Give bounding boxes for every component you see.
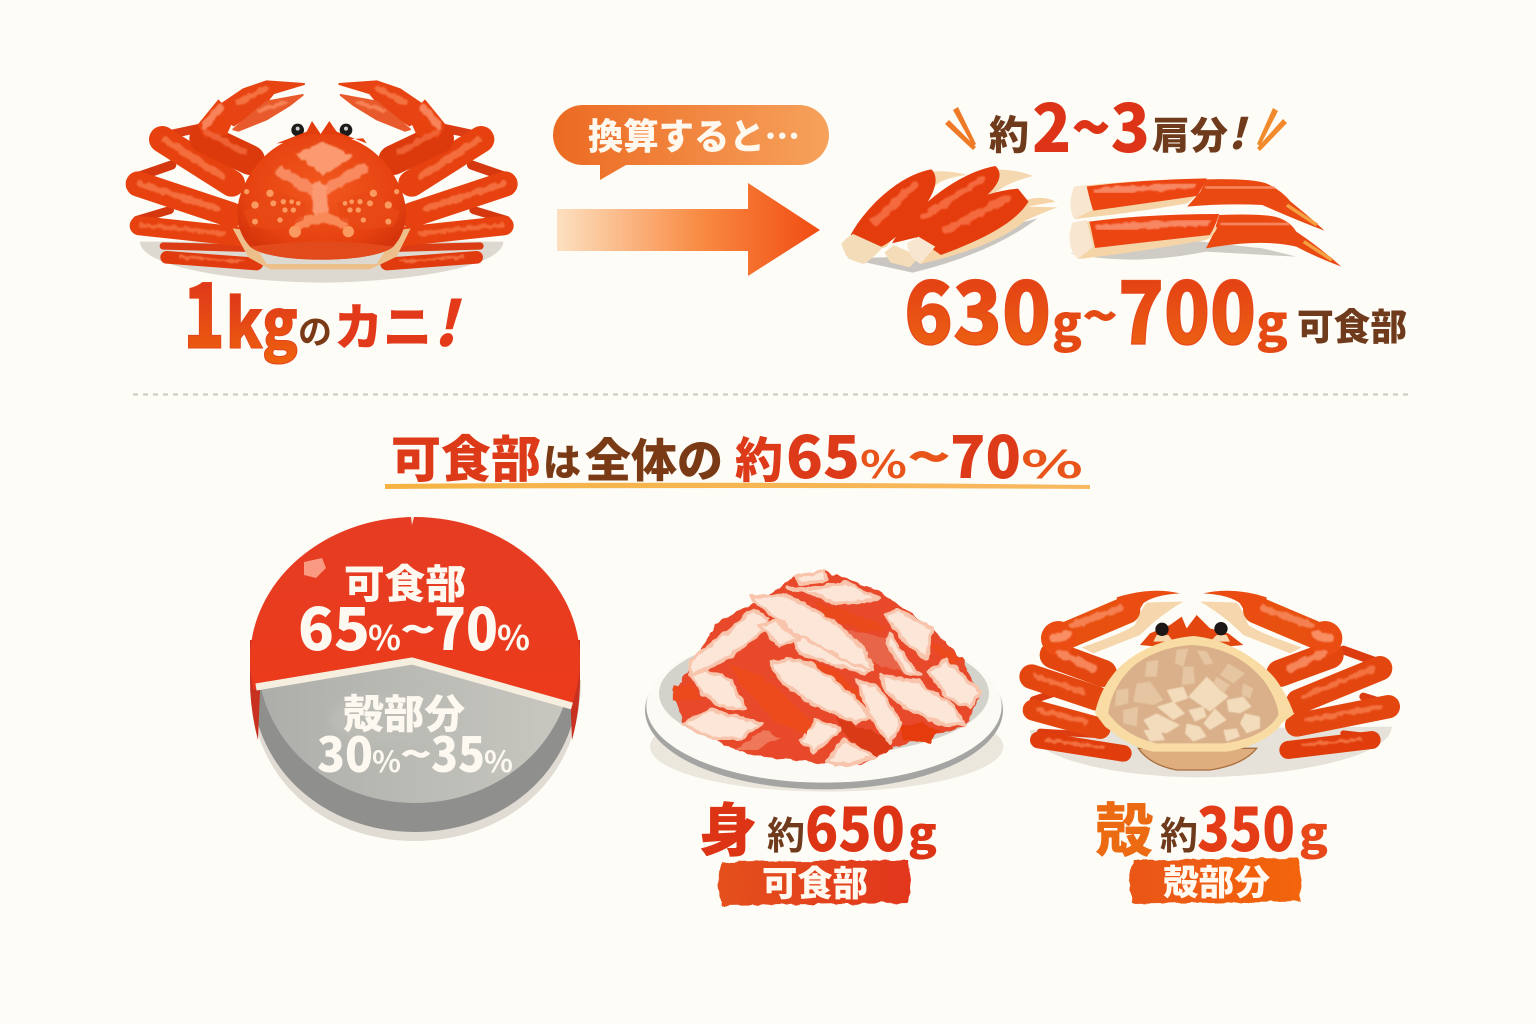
left legs and claw (133, 81, 304, 264)
heading: 可食部は全体の 約65%~70%: ~ (907, 416, 951, 491)
label: 殻 約350g (1095, 782, 1328, 869)
heading: 約2~3肩分!: 肩分 (1152, 105, 1228, 160)
label: 1kgのカニ!: 1 (183, 247, 225, 374)
weight: 630g~700g 可食部: ~ (1082, 275, 1118, 350)
shell crab legs (1032, 650, 1390, 753)
speech bubble: 換算すると… (553, 105, 829, 180)
edible text: 70 (434, 583, 498, 667)
weight: 630g~700g 可食部: 700 (1118, 246, 1256, 369)
right legs and claw (339, 81, 510, 264)
label: 1kgのカニ! (183, 247, 462, 374)
shell text: % (484, 739, 513, 781)
weight: 630g~700g 可食部 (904, 246, 1407, 369)
heading: 約2~3肩分!: 2~3 (1032, 76, 1150, 172)
shell rim (1095, 636, 1294, 752)
shell crab claw, right (1200, 591, 1342, 673)
edible text: 可食部 (344, 552, 466, 610)
shell text: 殻部分 (343, 682, 465, 740)
shell text (317, 682, 513, 786)
white meat flakes (683, 571, 980, 765)
burst marks right (1257, 108, 1287, 151)
tag: 殻部分 (1129, 855, 1302, 906)
heading: 可食部は全体の 約65%~70%: % (860, 434, 907, 489)
shell crab claw, left (1041, 591, 1183, 673)
pair shadow (1071, 240, 1338, 267)
tray under body (233, 228, 411, 269)
heading: 約2~3肩分!: ! (1228, 101, 1249, 162)
red flake on top (730, 602, 888, 735)
weight: 630g~700g 可食部: g (1256, 284, 1288, 356)
plate shadow (650, 702, 1003, 792)
label: 1kgのカニ!: カニ (334, 288, 432, 360)
edible text: ~ (400, 597, 436, 658)
tag: 可食部: 可食部 (762, 856, 868, 907)
shell crab shadow (1030, 727, 1392, 777)
weight: 630g~700g 可食部: 630 (904, 246, 1051, 369)
label: 殻 約350g: 約 (1160, 805, 1198, 860)
heading: 可食部は全体の 約65%~70% (391, 411, 1083, 495)
pie gray face (262, 664, 564, 803)
heading: 可食部は全体の 約65%~70%: は (543, 432, 581, 487)
crab shell illustration (1030, 591, 1392, 777)
crab eyes (291, 124, 352, 136)
label: 身 約650g: g (908, 798, 937, 862)
crab shell body (237, 121, 406, 260)
heading: 可食部は全体の 約65%~70%: 70 (950, 411, 1021, 495)
shell text: ~ (400, 724, 432, 779)
whole crab illustration (133, 81, 510, 283)
dark and orange flakes (673, 630, 963, 757)
heading: 可食部は全体の 約65%~70%: 全体の (585, 425, 723, 491)
burst marks left (945, 107, 976, 150)
label: 身 約650g: 650 (805, 782, 905, 869)
tray (1138, 748, 1257, 770)
speech bubble: 換算すると…: 換算すると… (588, 108, 800, 160)
pie base (250, 680, 581, 841)
heading: 可食部は全体の 約65%~70%: % (1021, 434, 1083, 489)
edible text: % (497, 611, 530, 660)
pie red face (250, 517, 580, 702)
heading: 約2~3肩分! (989, 76, 1249, 172)
meat pile base (673, 570, 980, 763)
label: 身 約650g: 身 (699, 784, 757, 868)
crab leg shells, right pair (1070, 178, 1341, 267)
weight: 630g~700g 可食部: 可食部 (1297, 297, 1407, 351)
crab leg shells, left bundle (841, 166, 1057, 273)
heading underline (385, 483, 1090, 489)
edible text: 65 (298, 583, 370, 667)
crab shadow (140, 242, 503, 283)
pie chart: edible vs shell (250, 517, 581, 841)
label: 1kgのカニ!: ! (433, 274, 462, 364)
heading: 約2~3肩分!: 約 (989, 103, 1029, 161)
pie side (250, 670, 580, 832)
tag: 殻部分: 殻部分 (1163, 855, 1270, 906)
shell text: % (372, 739, 401, 781)
label: 身 約650g: 約 (767, 805, 805, 860)
label: 身 約650g (699, 782, 937, 869)
shell interior (1108, 645, 1278, 743)
label: 1kgのカニ!: kg (226, 269, 298, 368)
shell text: 35 (431, 716, 485, 786)
label: 1kgのカニ!: の (298, 305, 332, 354)
shell text: 30 (317, 716, 373, 786)
edible text: % (368, 611, 401, 660)
shell ridges (280, 145, 363, 223)
heading: 可食部は全体の 約65%~70%: 65 (786, 411, 860, 495)
pie red side (250, 640, 262, 740)
shell meat blocks (1143, 677, 1260, 742)
plate of crab meat (645, 570, 1003, 792)
edible text (298, 552, 530, 667)
weight: 630g~700g 可食部: g (1052, 284, 1082, 356)
heading: 可食部は全体の 約65%~70%: 約 (735, 421, 783, 491)
plate (645, 631, 1003, 789)
label: 殻 約350g: 350 (1197, 782, 1295, 869)
arrow (557, 183, 820, 276)
tag: 可食部 (718, 856, 911, 907)
label: 殻 約350g: 殻 (1095, 784, 1153, 868)
heading: 可食部は全体の 約65%~70%: 可食部 (391, 420, 541, 492)
label: 殻 約350g: g (1299, 798, 1328, 862)
head with eyes (1140, 615, 1243, 650)
bundle shadow (847, 218, 1038, 273)
